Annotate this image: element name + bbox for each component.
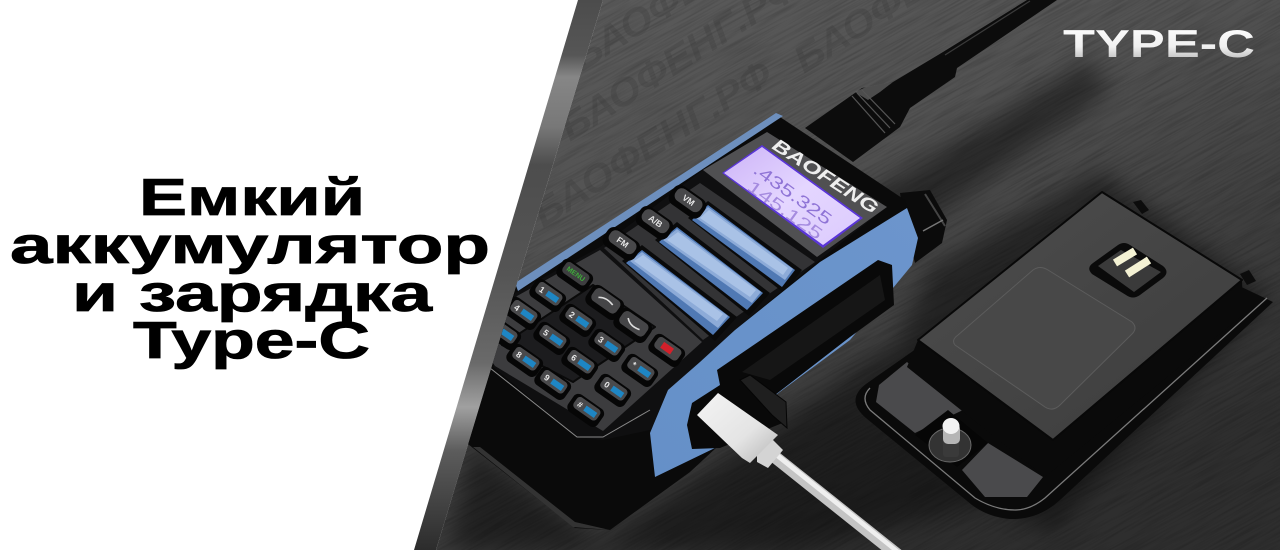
watermarks: БАОФЕНГ.РФ (525, 52, 780, 236)
keypad: 3 (596, 334, 606, 345)
upper blue edge strip (515, 113, 783, 291)
keypad bevel (502, 285, 655, 382)
keypad (498, 258, 686, 427)
cable (771, 452, 902, 550)
screen bezel (703, 132, 887, 257)
function keys (604, 185, 706, 261)
keypad: 8 (514, 349, 524, 360)
keypad: 0 (602, 379, 612, 390)
function keys: FM (615, 235, 630, 250)
battery contacts (1089, 243, 1166, 298)
keypad: 9 (542, 372, 552, 383)
keypad plate (480, 250, 702, 431)
battery tabs (1133, 200, 1149, 214)
plug ring (757, 440, 783, 468)
blue side bars (604, 183, 815, 341)
front face (493, 132, 887, 440)
diagonal grey band (414, 0, 603, 550)
battery plate (856, 288, 1273, 519)
battery top (918, 192, 1242, 440)
pin socket (922, 410, 988, 462)
plug housing (697, 393, 778, 463)
keypad: 6 (569, 352, 579, 363)
side button bar 1 (688, 201, 802, 293)
lower body highlight (473, 447, 610, 530)
keypad: 1 (537, 284, 547, 295)
keypad: # (575, 399, 585, 410)
title: Type-C (133, 312, 370, 370)
antenna (805, 0, 1057, 162)
plate rim line (865, 298, 1267, 510)
side button bar 3 (622, 245, 737, 341)
port cover inner (742, 275, 885, 380)
plate left panel (876, 362, 963, 433)
plate lower panel (962, 443, 1043, 497)
title: и зарядка (72, 265, 434, 323)
keypad edge highlight (490, 368, 650, 437)
keypad: MENU (565, 266, 586, 283)
table shadows (450, 60, 1270, 550)
title (10, 169, 490, 370)
port clip (740, 375, 787, 428)
blue side panel (650, 208, 918, 477)
lcd screen (722, 145, 863, 248)
keypad: 4 (512, 302, 522, 313)
battery (907, 191, 1256, 438)
battery side (907, 282, 1242, 410)
function keys: VM (680, 192, 697, 208)
lcd screen: .435.325 (750, 160, 835, 229)
brushed texture (430, 0, 1280, 550)
function keys: A/B (647, 213, 664, 229)
type-c label: TYPE-C (1063, 23, 1255, 66)
title: Емкий (139, 169, 365, 227)
keypad: * (630, 360, 639, 370)
BAOFENG logo: BAOFENG (769, 135, 882, 218)
volume knob (900, 190, 947, 263)
black port cover (687, 260, 894, 449)
dark table background (430, 0, 1280, 550)
keypad: 5 (541, 327, 551, 338)
side button bar 2 (655, 222, 770, 316)
product photo (430, 0, 1280, 550)
title: аккумулятор (10, 217, 490, 275)
cable highlight (774, 452, 899, 550)
white text panel (0, 0, 640, 550)
radio body (450, 113, 918, 530)
keypad: 2 (567, 309, 577, 320)
usb type-c cable (697, 393, 902, 550)
lcd screen: 145.125 (744, 177, 826, 244)
watermarks (538, 0, 900, 212)
battery label recess (954, 268, 1135, 409)
